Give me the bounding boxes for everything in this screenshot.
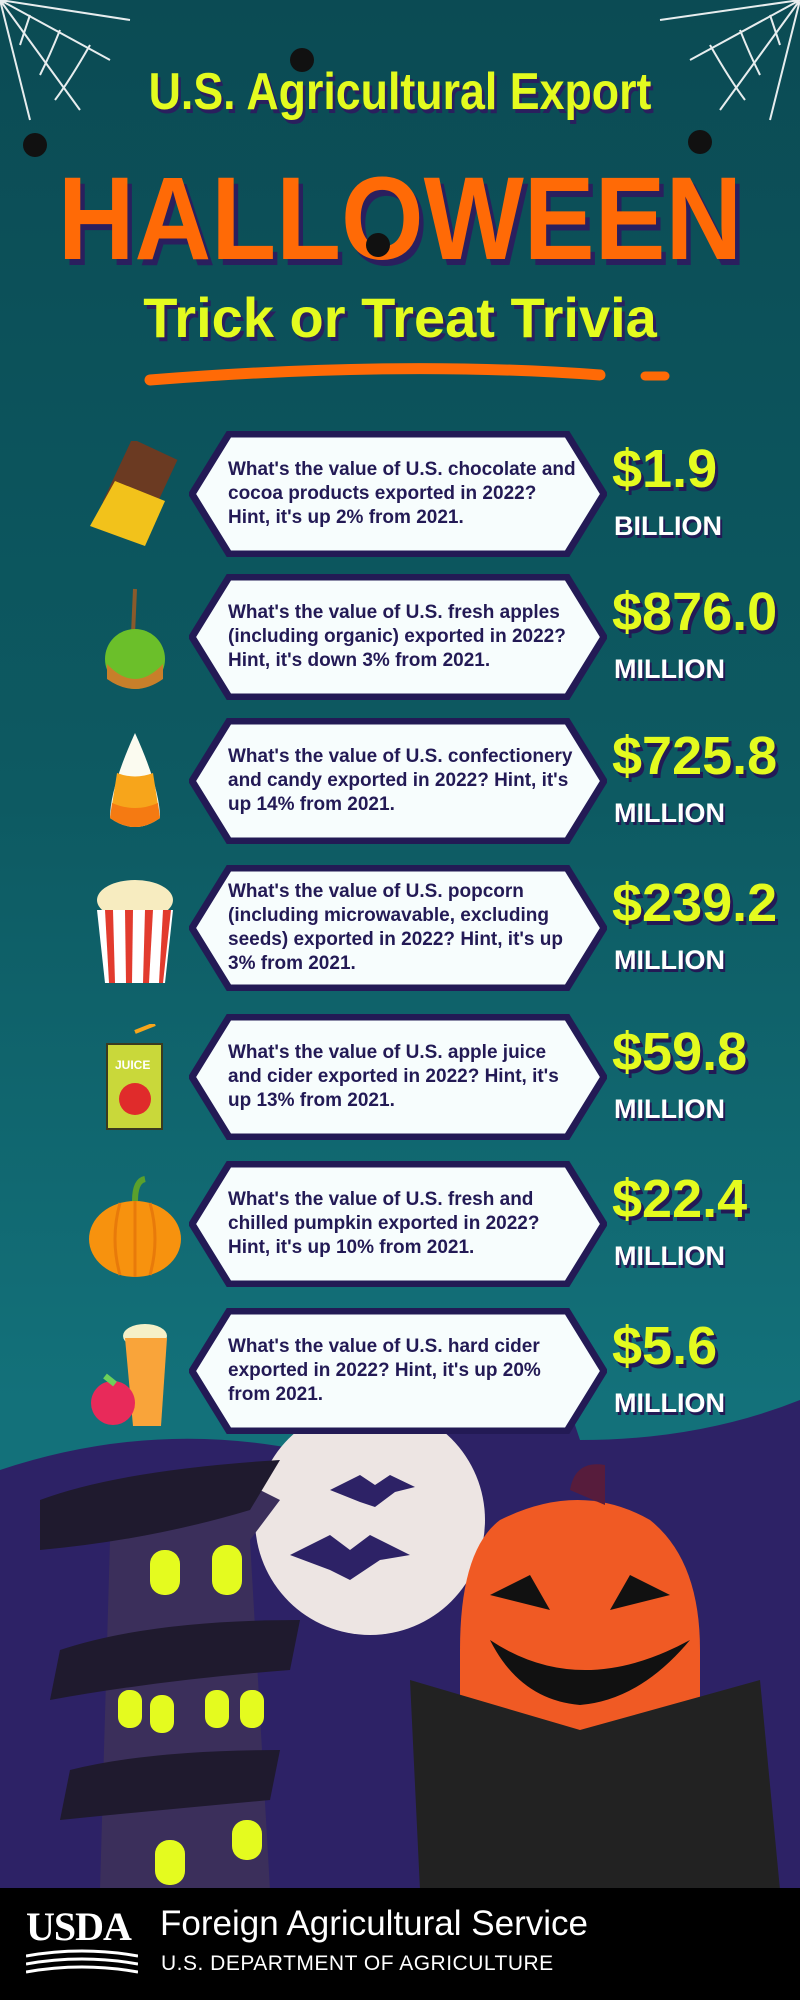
row 3: candy: What's the value of U.S. confectionery and candy exported in 2022? Hint, it's up 14% from 2021. [228, 746, 572, 815]
question box [189, 574, 607, 700]
row 2: apples: What's the value of U.S. fresh apples (including organic) exported in 2022? Hint, it's down 3% from 2021. [228, 602, 566, 671]
icon: popcorn [97, 880, 173, 983]
icon: juice box: JUICE [115, 1058, 150, 1072]
value: $1.9 [612, 439, 717, 499]
question box [189, 865, 607, 991]
row 3: candy: MILLION [614, 798, 725, 828]
spider webs decoration [0, 0, 800, 120]
icon: pumpkin [89, 1176, 181, 1277]
row 6: pumpkin [89, 1161, 750, 1287]
footer: U.S. DEPARTMENT OF AGRICULTURE [161, 1952, 554, 1975]
row 4: popcorn: What's the value of U.S. popcorn (including microwavable, excluding seeds) exported in 2022? Hint, it's up 3% from 2021. [228, 881, 563, 974]
row 7: hard cider: MILLION [614, 1388, 725, 1418]
question box [189, 1014, 607, 1140]
value: $59.8 [612, 1022, 747, 1082]
row 7: hard cider [91, 1308, 726, 1434]
row 6: pumpkin: What's the value of U.S. fresh and chilled pumpkin exported in 2022? Hint, it's up 10% from 2021. [228, 1189, 539, 1258]
value: $22.4 [612, 1169, 747, 1229]
icon: juice box [106, 1024, 163, 1130]
title: HALLOWEEN: HALLOWEEN [58, 153, 742, 285]
row 1: chocolate: BILLION [614, 511, 722, 541]
icon: candy corn [110, 733, 160, 827]
row 5: apple juice: What's the value of U.S. apple juice and cider exported in 2022? Hint, it's up 13% from 2021. [228, 1042, 559, 1111]
icon: chocolate bar [90, 441, 178, 546]
orange underline [144, 363, 670, 386]
footer [0, 1888, 800, 2000]
value: $239.2 [612, 873, 777, 933]
row 4: popcorn: MILLION [614, 945, 725, 975]
value: $5.6 [612, 1316, 717, 1376]
icon: candy apple [105, 588, 165, 689]
row 4: popcorn [97, 865, 778, 991]
question box [189, 1308, 607, 1434]
row 5: apple juice [106, 1014, 748, 1140]
row 5: apple juice: MILLION [614, 1094, 725, 1124]
icon: cider glass and apple [91, 1324, 167, 1426]
row 3: candy [110, 718, 778, 844]
subtitle: Trick or Treat Trivia: Trick or Treat Trivia [143, 286, 657, 349]
logo: USDA: USDA [26, 1904, 131, 1949]
title: U.S. Agricultural Export: U.S. Agricultural Export [149, 63, 651, 121]
question box [189, 431, 607, 557]
question box [189, 718, 607, 844]
row 2: apples: MILLION [614, 654, 725, 684]
row 7: hard cider: What's the value of U.S. hard cider exported in 2022? Hint, it's up 20% from 2021. [228, 1336, 541, 1405]
row 2: apples [105, 574, 778, 700]
bottom scene: hills, moon, house, pumpkin [0, 1400, 800, 1888]
logo: USDA [26, 1904, 138, 1974]
spiders [23, 48, 712, 257]
value: $725.8 [612, 726, 777, 786]
value: $876.0 [612, 582, 777, 642]
question box [189, 1161, 607, 1287]
row 6: pumpkin: MILLION [614, 1241, 725, 1271]
footer text: Foreign Agricultural Service [160, 1904, 588, 1943]
row 1: chocolate [90, 431, 722, 557]
row 1: chocolate: What's the value of U.S. chocolate and cocoa products exported in 2022? Hint, it's up 2% from 2021. [228, 459, 576, 528]
